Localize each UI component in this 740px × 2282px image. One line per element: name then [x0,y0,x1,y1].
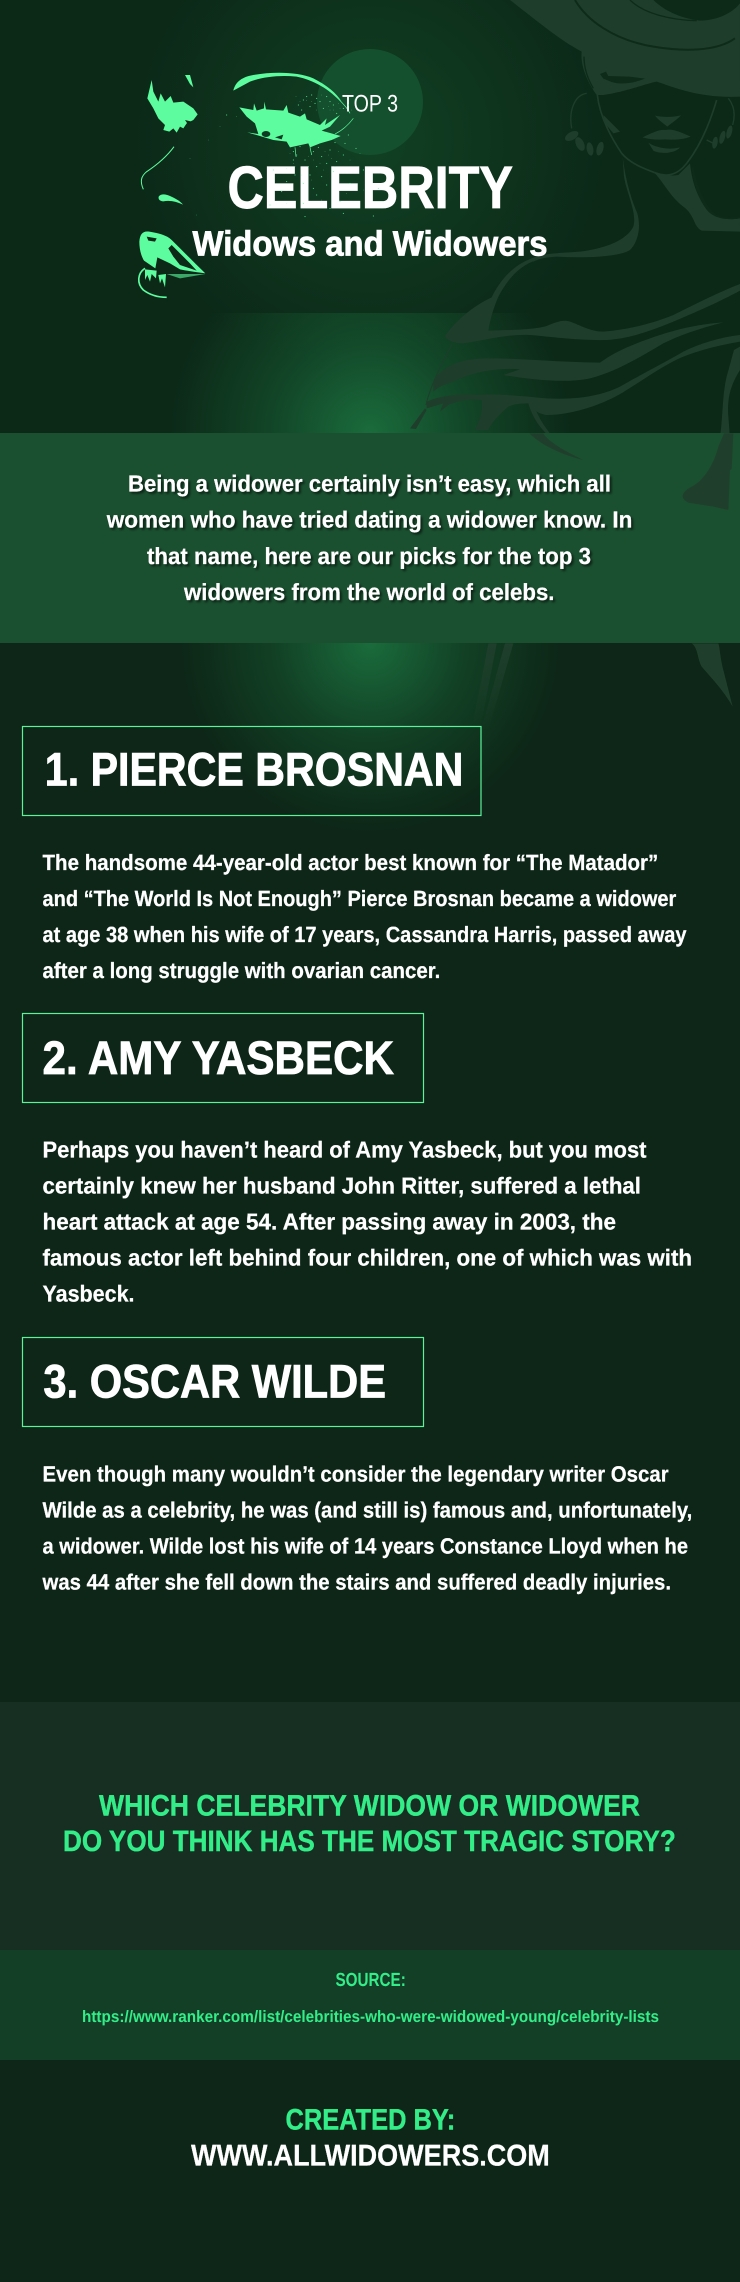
hair strands over intro band [529,433,740,510]
icon: left eye [147,75,198,133]
icon: right eye and brow [233,73,353,157]
footer credit [191,2104,550,2173]
body text 2 [42,1136,692,1306]
hero section [0,0,740,510]
heading box 2 [22,1014,424,1102]
body text 2: certainly knew her husband John Ritter, suffered a lethal [42,1172,641,1198]
heading box 3 [22,1338,424,1426]
icon: nose [141,147,183,205]
intro text: that name, here are our picks for the top 3 [147,543,591,569]
body text 3: a widower. Wilde lost his wife of 14 years Constance Lloyd when he [42,1534,688,1559]
hero background glow [0,0,740,433]
lower glow and strands [170,643,733,838]
body text 1: at age 38 when his wife of 17 years, Cassandra Harris, passed away [42,922,687,947]
body text 2: famous actor left behind four children, one of which was with [42,1244,692,1270]
section 3: Oscar Wilde [22,1338,692,1595]
panel: intro band [0,433,740,643]
intro text: widowers from the world of celebs. [183,579,554,605]
footer credit: CREATED BY: [286,2104,455,2136]
body text 3: Wilde as a celebrity, he was (and still is) famous and, unfortunately, [42,1498,692,1523]
body text 2: Yasbeck. [42,1280,134,1306]
body text 1 [42,850,687,983]
body text 3: was 44 after she fell down the stairs and suffered deadly injuries. [42,1570,671,1595]
panel: call to action: WHICH CELEBRITY WIDOW OR WIDOWER [99,1790,640,1822]
heading box 2: 2. AMY YASBECK [42,1031,394,1084]
intro text: Being a widower certainly isn’t easy, which all [128,471,611,497]
panel: source: https://www.ranker.com/list/celebrities-who-were-widowed-young/celebrity-lists [82,2008,659,2026]
footer credit: WWW.ALLWIDOWERS.COM [191,2140,550,2173]
body text 3: Even though many wouldn’t consider the legendary writer Oscar [42,1462,669,1487]
panel: call to action [0,1702,740,1950]
illustration: glowing face features [139,73,353,297]
hair strands [410,258,740,442]
icon: lips [139,231,205,297]
body text 1: after a long struggle with ovarian cancer. [42,958,440,983]
body text 1: and “The World Is Not Enough” Pierce Brosnan became a widower [42,886,677,911]
body text 2: Perhaps you haven’t heard of Amy Yasbeck, but you most [42,1136,647,1162]
body text 2: heart attack at age 54. After passing away in 2003, the [42,1208,616,1234]
intro text: women who have tried dating a widower know. In [106,507,632,533]
section 1: Pierce Brosnan [22,726,687,983]
panel: call to action: DO YOU THINK HAS THE MOST TRAGIC STORY? [63,1825,676,1858]
panel: source: SOURCE: [336,1970,406,1991]
subtitle: Widows and Widowers: Widows and Widowers [192,225,548,264]
decorative circle behind TOP 3 [317,49,423,155]
section 2: Amy Yasbeck [22,1014,692,1306]
heading box 1 [22,726,481,816]
body text 3 [42,1462,692,1595]
heading box 3: 3. OSCAR WILDE [43,1354,386,1407]
title: CELEBRITY: CELEBRITY [228,154,513,221]
title: TOP 3: TOP 3 [342,91,398,118]
title block [192,91,548,264]
body text 1: The handsome 44-year-old actor best known for “The Matador” [42,850,658,875]
panel: source [0,1950,740,2060]
paint splatter over title [190,95,378,217]
intro text [106,471,632,605]
heading box 1: 1. PIERCE BROSNAN [45,743,463,796]
illustration: woman in hat silhouette [410,0,740,510]
